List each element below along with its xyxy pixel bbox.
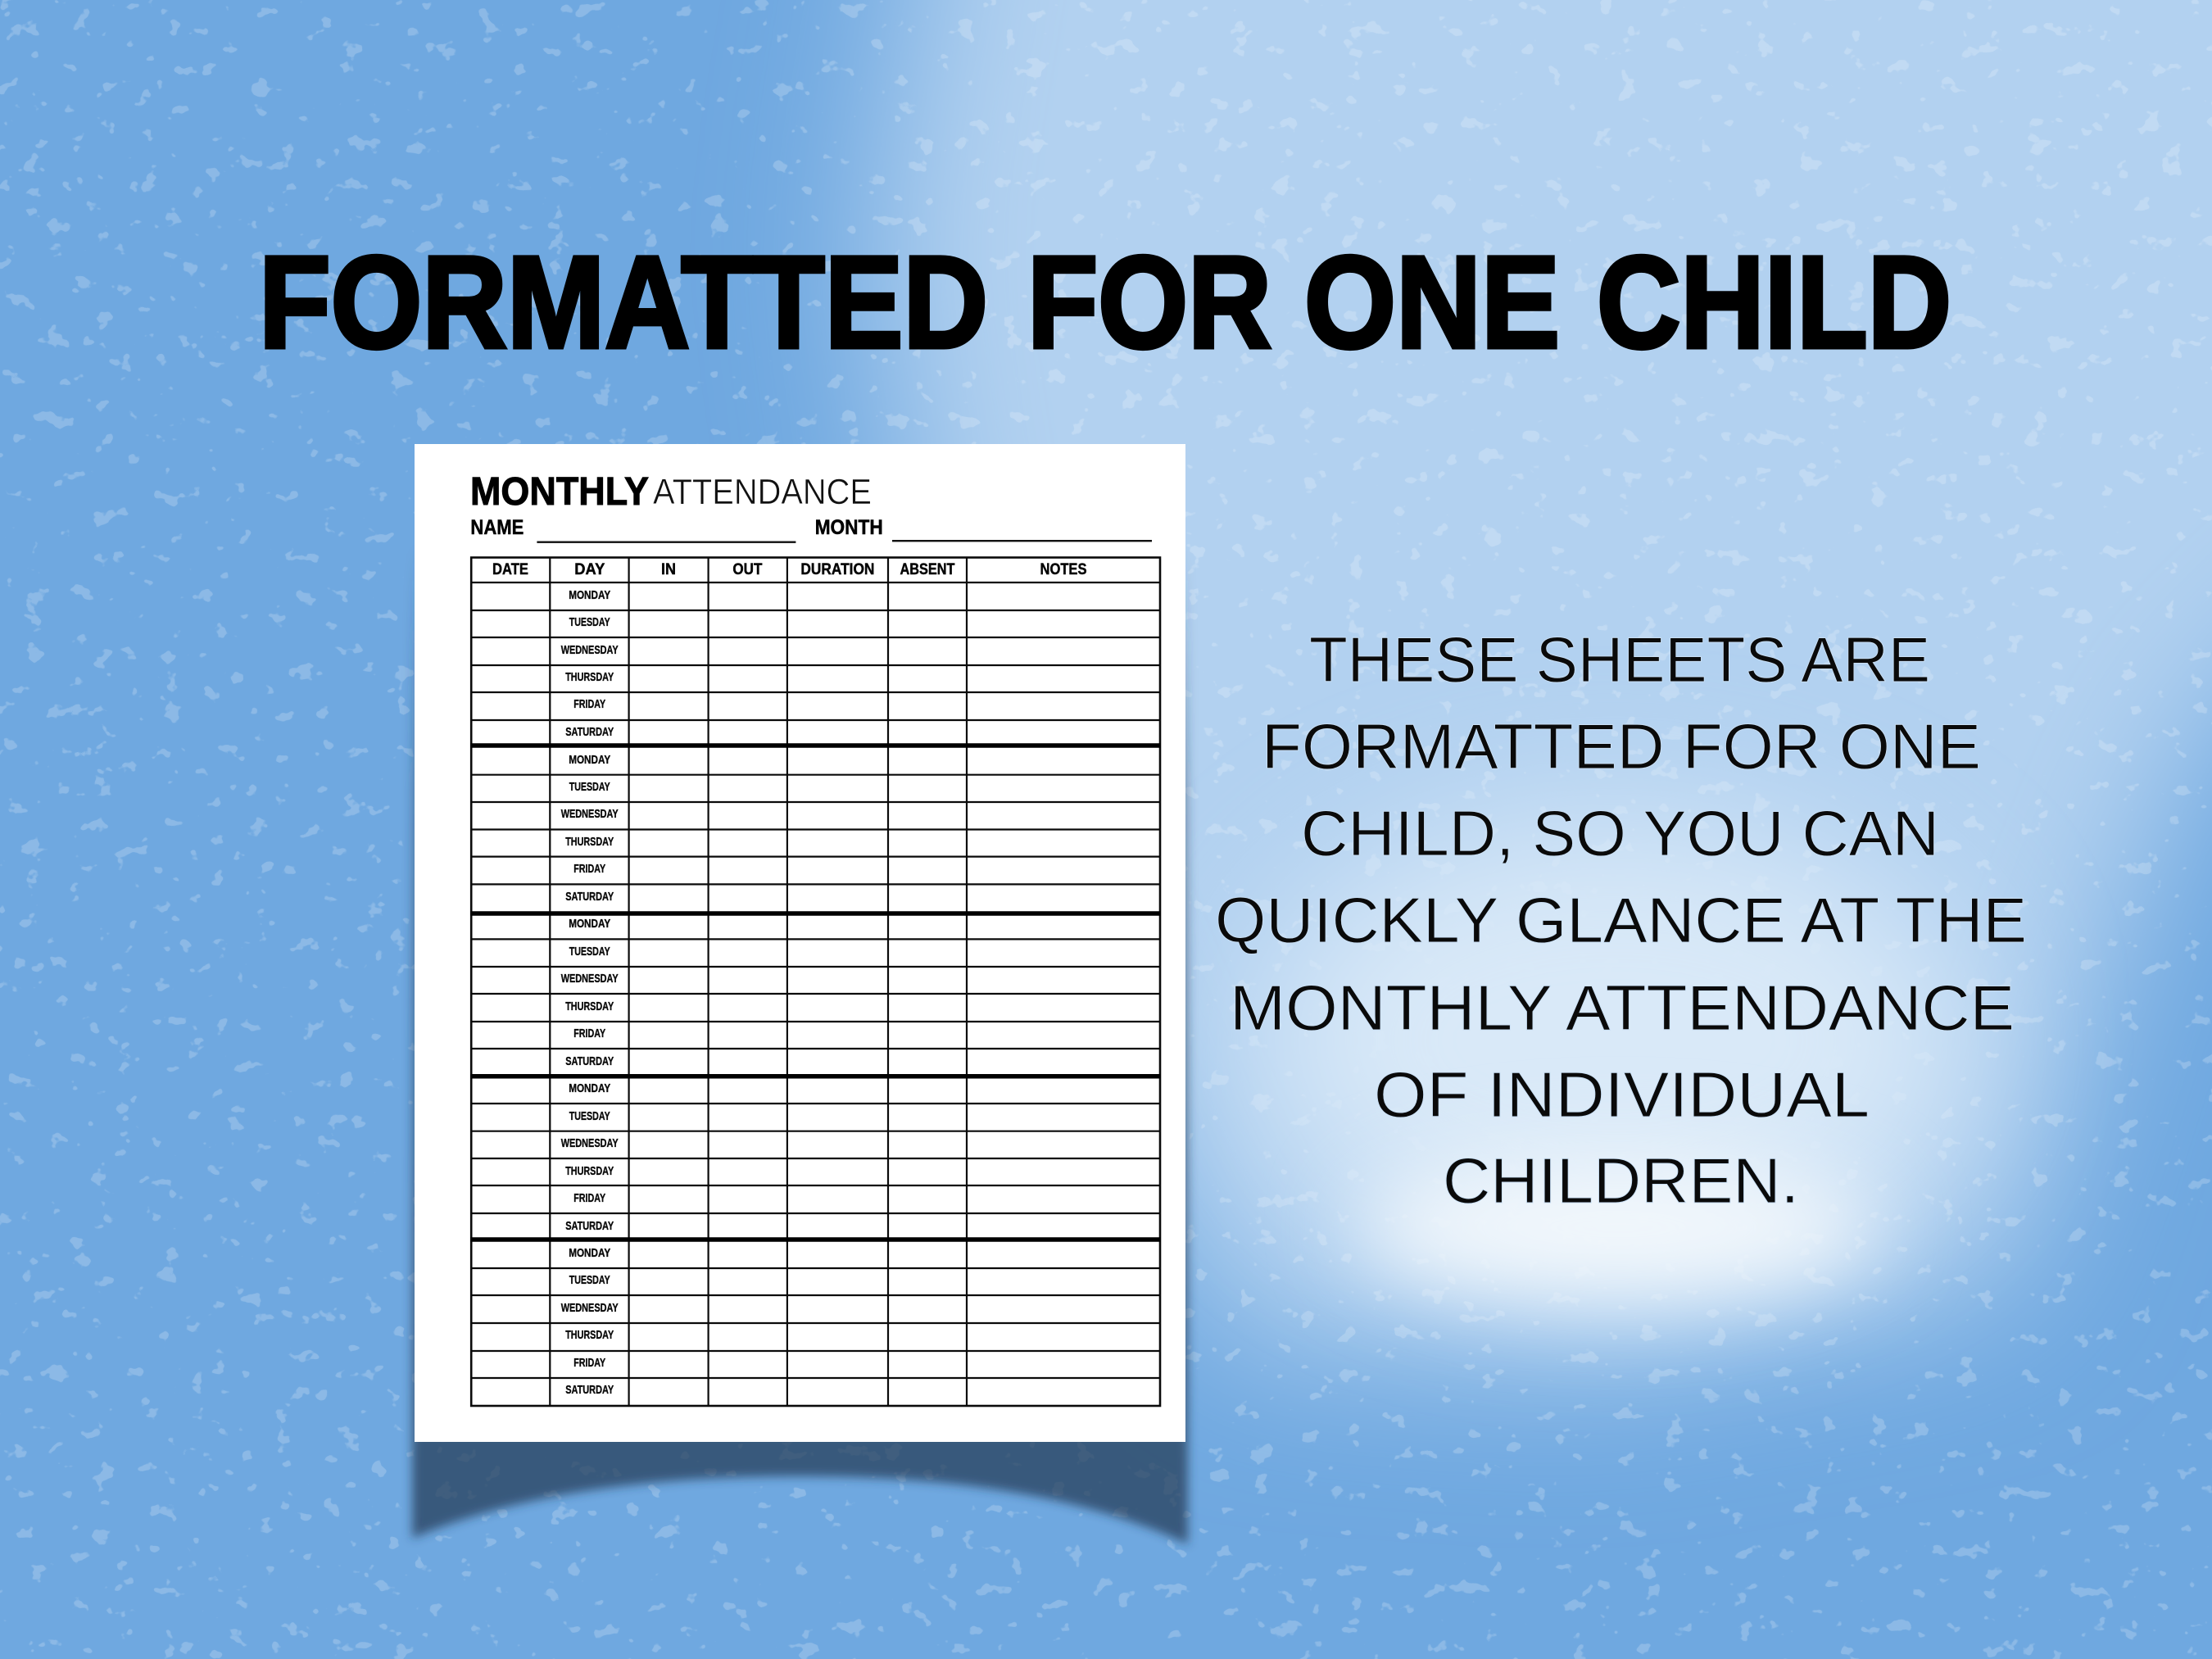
description text block: CHILD, SO YOU CAN xyxy=(1301,797,1939,869)
table header row xyxy=(492,561,1086,578)
day labels column: TUESDAY xyxy=(569,945,610,959)
day labels column: WEDNESDAY xyxy=(561,972,619,986)
description text block: QUICKLY GLANCE AT THE xyxy=(1215,884,2027,956)
title: ONE xyxy=(1304,229,1560,375)
day labels column: WEDNESDAY xyxy=(561,808,619,821)
table header row: ABSENT xyxy=(900,561,955,578)
day labels column: MONDAY xyxy=(569,918,610,931)
table grid xyxy=(470,557,1161,1406)
day labels column: TUESDAY xyxy=(569,1110,610,1123)
day labels column: THURSDAY xyxy=(565,671,614,684)
day labels column: WEDNESDAY xyxy=(561,644,619,657)
day labels column xyxy=(561,589,619,1397)
table header row: DATE xyxy=(492,561,528,578)
title: CHILD xyxy=(1597,229,1951,375)
background: central white glow xyxy=(1262,819,1966,1297)
sheet heading: ATTENDANCE xyxy=(653,472,872,512)
month field: MONTH xyxy=(815,516,883,539)
day labels column: FRIDAY xyxy=(573,698,605,711)
description text block: THESE SHEETS ARE xyxy=(1309,623,1930,696)
table header row: NOTES xyxy=(1040,561,1086,578)
day labels column: THURSDAY xyxy=(565,1000,614,1013)
table header row: DURATION xyxy=(800,561,874,578)
day labels column: SATURDAY xyxy=(565,891,614,904)
title xyxy=(259,229,1951,375)
day labels column: SATURDAY xyxy=(565,1384,614,1397)
table header row: IN xyxy=(661,561,676,578)
table header row: DAY xyxy=(574,561,605,578)
day labels column: TUESDAY xyxy=(569,1274,610,1287)
day labels column: MONDAY xyxy=(569,589,610,602)
day labels column: SATURDAY xyxy=(565,726,614,739)
name field: NAME xyxy=(470,516,524,539)
day labels column: WEDNESDAY xyxy=(561,1137,619,1150)
day labels column: THURSDAY xyxy=(565,1165,614,1178)
description text block xyxy=(1215,623,2027,1217)
day labels column: FRIDAY xyxy=(573,1027,605,1040)
paper drop shadow xyxy=(412,545,1188,1544)
day labels column: TUESDAY xyxy=(569,616,610,629)
description text block: CHILDREN. xyxy=(1443,1145,1799,1217)
day labels column: WEDNESDAY xyxy=(561,1302,619,1315)
day labels column: MONDAY xyxy=(569,754,610,767)
day labels column: FRIDAY xyxy=(573,1192,605,1205)
day labels column: FRIDAY xyxy=(573,863,605,876)
description text block: FORMATTED FOR ONE xyxy=(1262,710,1981,782)
day labels column: TUESDAY xyxy=(569,781,610,794)
title: FORMATTED xyxy=(259,229,988,375)
paper sheet xyxy=(415,444,1185,1442)
description text block: OF INDIVIDUAL xyxy=(1374,1058,1870,1131)
day labels column: MONDAY xyxy=(569,1082,610,1095)
description text block: MONTHLY ATTENDANCE xyxy=(1230,972,2015,1044)
title: FOR xyxy=(1027,229,1271,375)
day labels column: FRIDAY xyxy=(573,1357,605,1370)
day labels column: MONDAY xyxy=(569,1247,610,1260)
day labels column: THURSDAY xyxy=(565,836,614,849)
table header row: OUT xyxy=(732,561,763,578)
day labels column: THURSDAY xyxy=(565,1329,614,1342)
panel: attendance sheet xyxy=(415,444,1185,1442)
day labels column: SATURDAY xyxy=(565,1220,614,1233)
day labels column: SATURDAY xyxy=(565,1055,614,1068)
sheet heading xyxy=(470,470,872,514)
sheet heading: MONTHLY xyxy=(470,470,649,514)
